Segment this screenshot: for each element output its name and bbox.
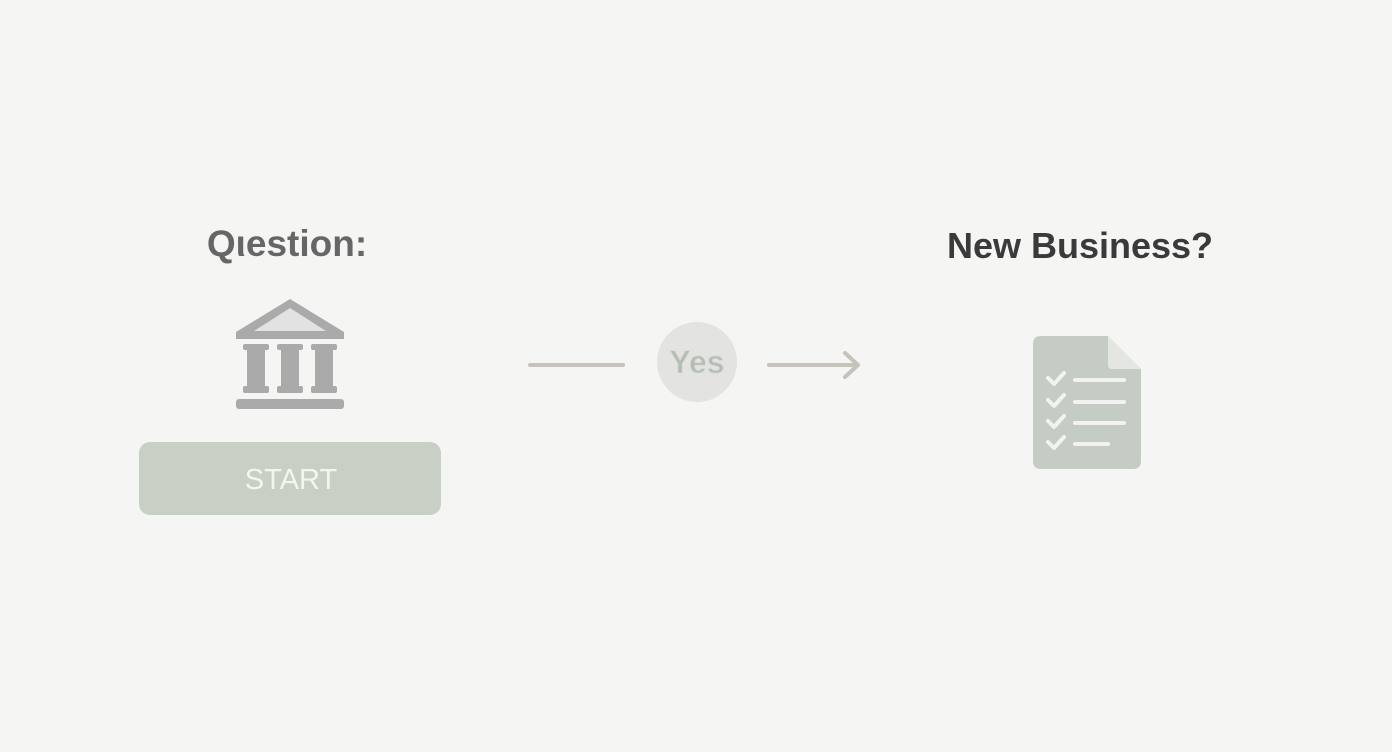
start button <box>139 442 441 515</box>
arrow: yes to new business <box>769 353 858 377</box>
icon: checklist document <box>1033 336 1141 469</box>
yes circle: Yes <box>669 344 725 380</box>
yes circle <box>657 322 737 402</box>
arrow: start to yes <box>530 363 623 367</box>
heading: new business: New Business? <box>947 225 1213 266</box>
start button: START <box>245 464 337 496</box>
icon: bank building <box>236 299 344 409</box>
heading: question: Qιestion: <box>207 223 367 264</box>
